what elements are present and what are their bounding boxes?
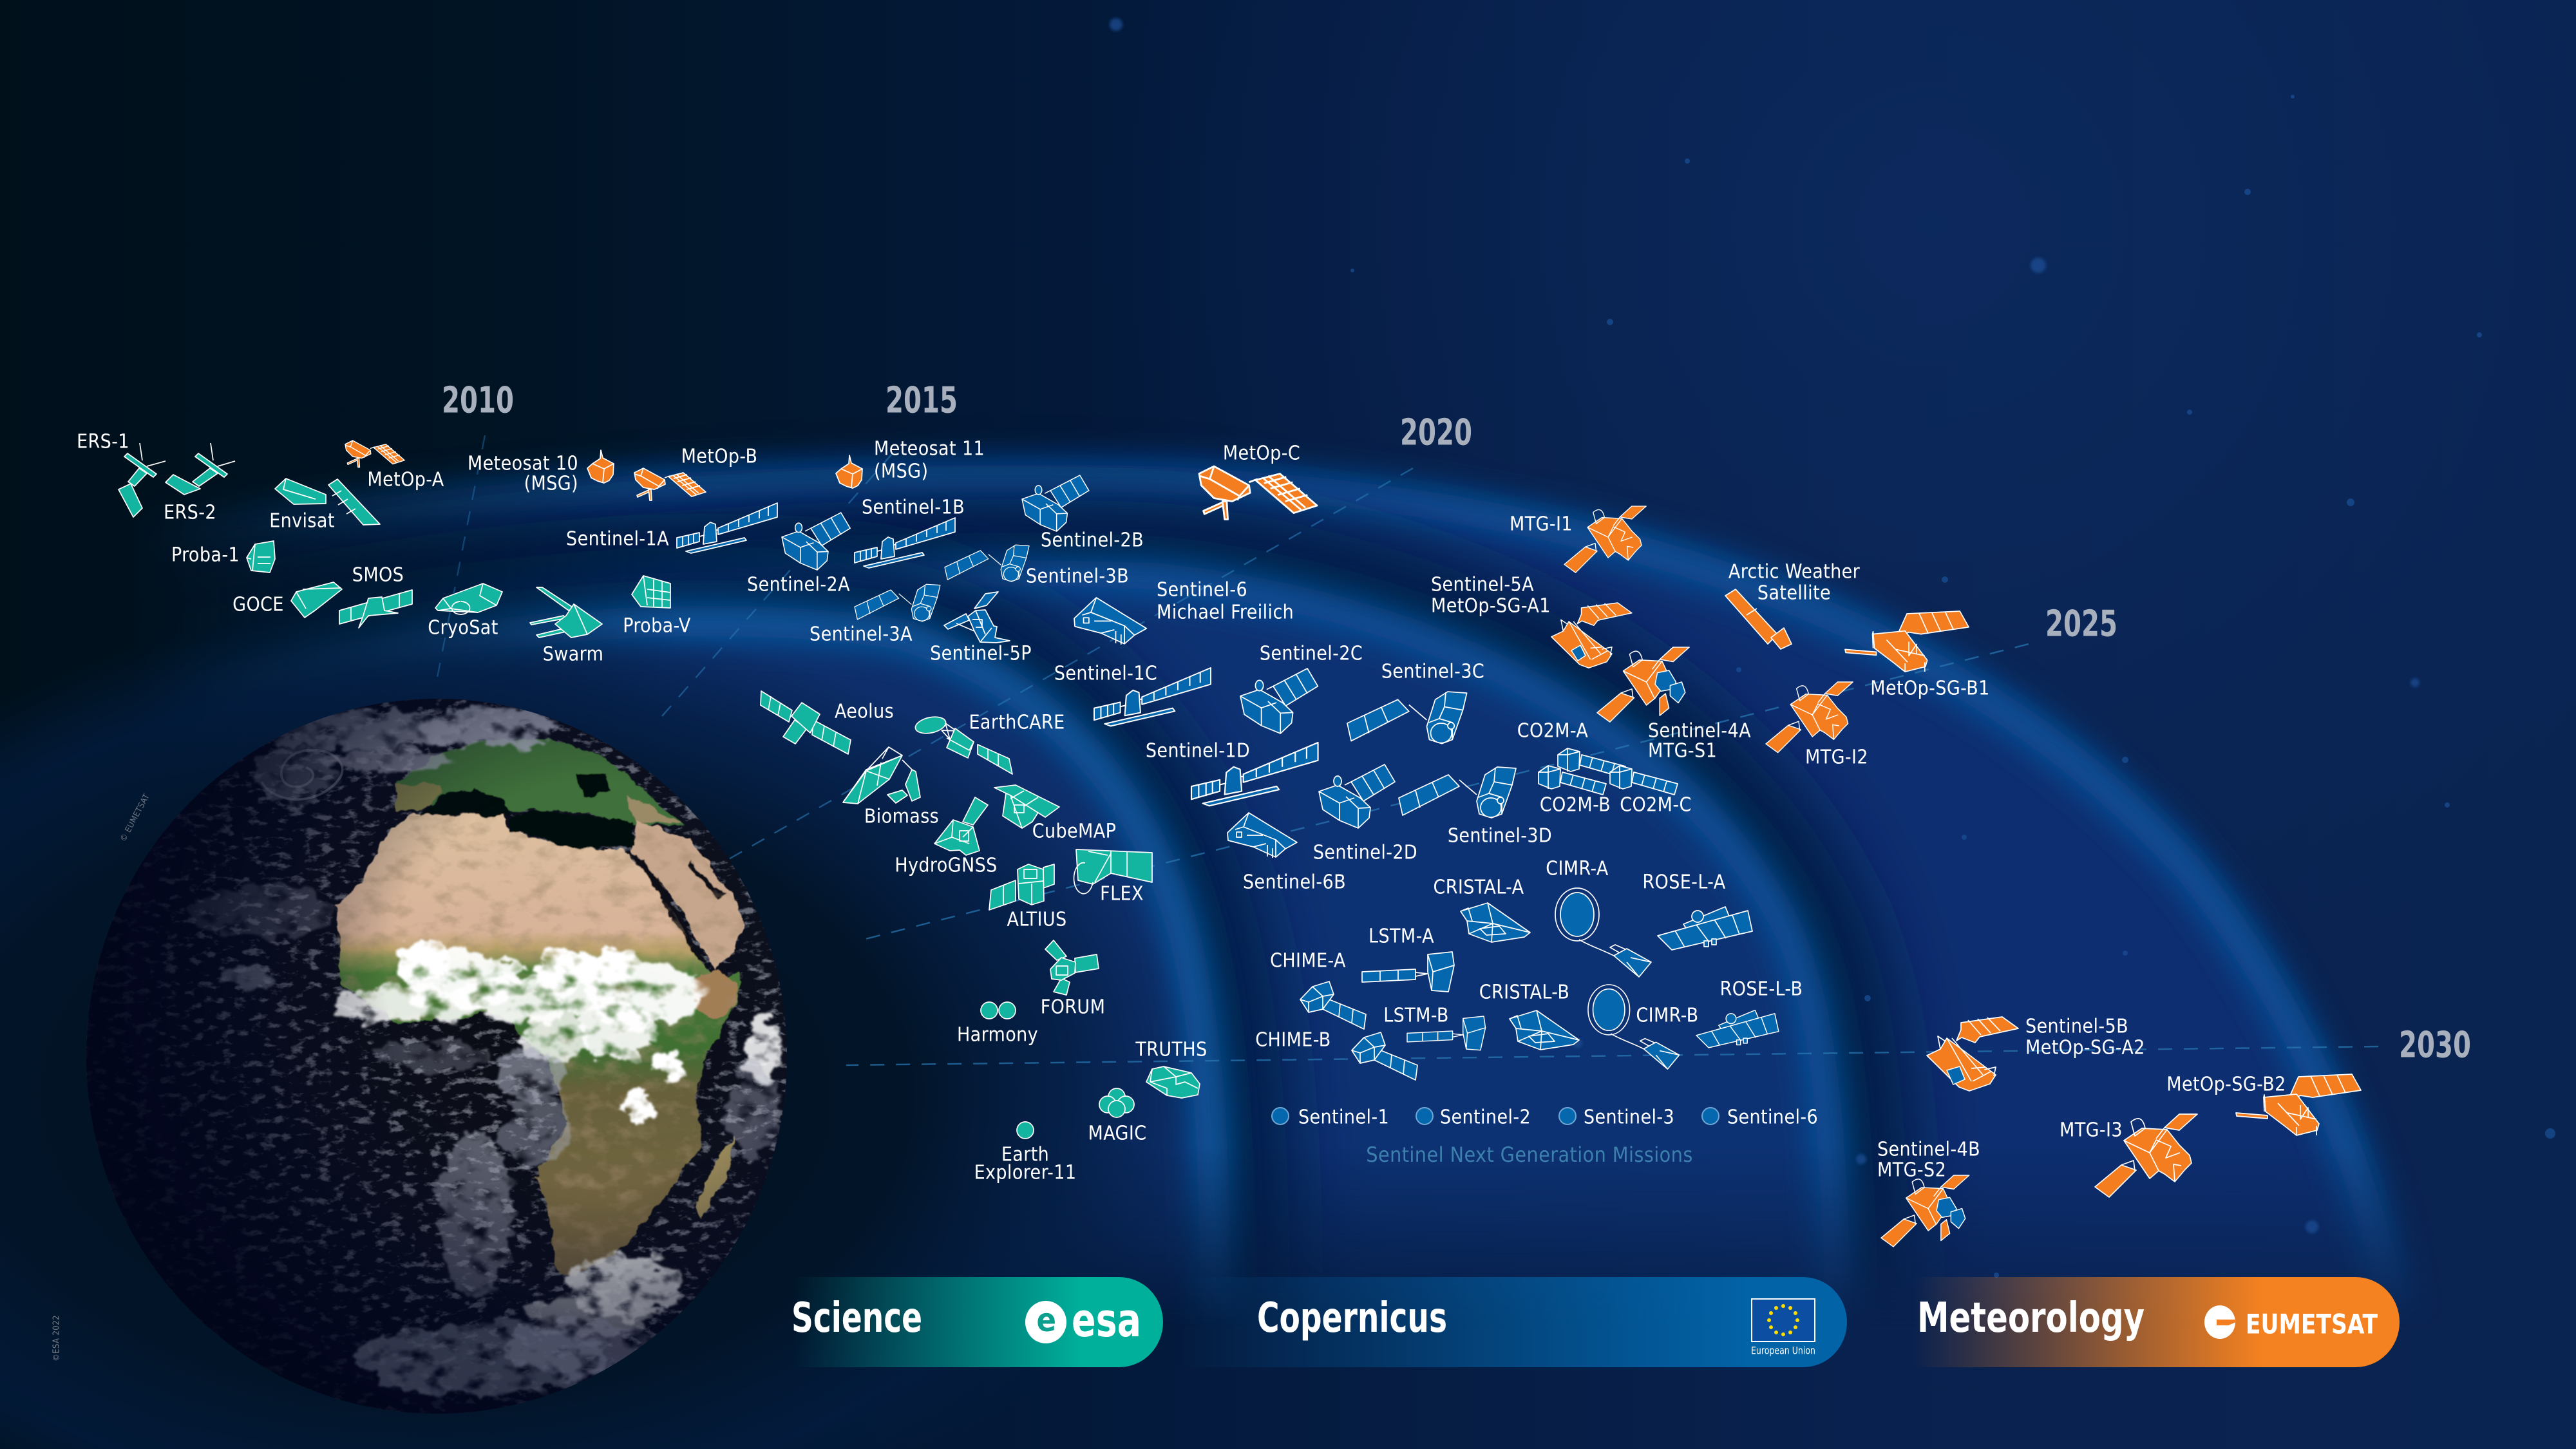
satellite: SMOS: SMOS [352, 564, 404, 586]
satellite: Aeolus: Aeolus [835, 701, 894, 723]
satellite: Sentinel-5A MetOp-SG-A1 [1431, 573, 1632, 668]
legend caption: Sentinel Next Generation Missions [1366, 1142, 1693, 1167]
satellite: Sentinel-5B MetOp-SG-A2: Sentinel-5B [2025, 1015, 2128, 1038]
Earth globe [74, 686, 799, 1431]
satellite: Sentinel-3C: Sentinel-3C [1381, 661, 1484, 683]
satellite: EarthCARE: EarthCARE [969, 711, 1065, 734]
satellite: MetOp-C [1199, 442, 1317, 519]
satellite: Sentinel-4A MTG-S1 [1597, 647, 1751, 762]
satellite: LSTM-B [1383, 1005, 1486, 1050]
satellite: Sentinel-1B [855, 496, 965, 568]
satellite: CHIME-B [1255, 1029, 1417, 1080]
satellite: CO2M-A [1517, 720, 1625, 777]
satellite: ROSE-L-A: ROSE-L-A [1642, 871, 1726, 894]
year timeline dashed lines [435, 435, 2378, 1065]
satellite: Proba-V: Proba-V [623, 614, 691, 638]
satellite: ALTIUS: ALTIUS [1007, 908, 1067, 931]
satellite: Arctic Weather Satellite: Satellite [1757, 582, 1831, 604]
satellite: MetOp-SG-B2 [2166, 1073, 2361, 1135]
satellite: MetOp-B: MetOp-B [681, 446, 757, 468]
satellite: CRISTAL-A [1434, 876, 1530, 942]
satellite: Sentinel-4B MTG-S2: MTG-S2 [1877, 1159, 1946, 1181]
satellite: HydroGNSS [895, 797, 998, 877]
satellite: Sentinel-2B: Sentinel-2B [1041, 529, 1144, 551]
satellite: CIMR-B: CIMR-B [1636, 1005, 1699, 1027]
satellite: Sentinel-2C [1240, 643, 1363, 734]
year labels: 2020 [1400, 412, 1472, 453]
satellite: EarthCARE [914, 711, 1065, 774]
satellite: CryoSat [428, 583, 502, 639]
satellite: Sentinel-3C [1347, 661, 1484, 744]
satellite: Sentinel-4A MTG-S1: Sentinel-4A [1648, 720, 1751, 742]
satellite: Sentinel-1D [1146, 739, 1318, 806]
logo: EUMETSAT [2204, 1305, 2378, 1340]
satellite: Meteosat 11: Meteosat 11 [874, 438, 985, 460]
year labels: 2025 [2045, 603, 2117, 645]
satellite: TRUTHS: TRUTHS [1135, 1038, 1208, 1061]
satellite: Sentinel-1A [566, 503, 777, 553]
panel: Copernicus Sentinels [566, 475, 1803, 1080]
satellite: Swarm: Swarm [543, 643, 603, 666]
satellite: MTG-I2 [1766, 682, 1868, 769]
satellite: FLEX [1074, 849, 1152, 905]
panel: Science programme bar: Science [791, 1294, 922, 1342]
satellite: LSTM-A: LSTM-A [1368, 925, 1434, 948]
satellite: Sentinel-1C: Sentinel-1C [1054, 662, 1157, 685]
satellite: Proba-1 [171, 541, 275, 573]
satellite: ERS-2 [164, 443, 235, 524]
satellite: Sentinel-6B [1227, 813, 1346, 894]
satellite: CHIME-B: CHIME-B [1255, 1029, 1331, 1051]
logo: esa [1025, 1293, 1141, 1347]
satellite: Aeolus [761, 691, 894, 754]
satellite: FORUM [1041, 940, 1105, 1019]
satellite: Sentinel-3A: Sentinel-3A [810, 623, 913, 645]
satellite: CO2M-C: CO2M-C [1620, 793, 1692, 817]
satellite: ROSE-L-B [1696, 978, 1803, 1048]
logo: esa: esa [1072, 1293, 1141, 1347]
satellite: Envisat [269, 478, 380, 532]
satellite: MAGIC [1088, 1088, 1146, 1145]
satellite: CubeMAP [994, 785, 1116, 842]
satellite: MetOp-A: MetOp-A [367, 469, 444, 491]
satellite: Sentinel-2D: Sentinel-2D [1313, 841, 1417, 864]
satellite: Sentinel-2A: Sentinel-2A [747, 573, 850, 596]
satellite: Sentinel-4B MTG-S2 [1877, 1139, 1980, 1247]
satellite: Arctic Weather Satellite [1725, 560, 1861, 649]
satellite: MTG-I1: MTG-I1 [1510, 513, 1573, 536]
satellite: ERS-2: ERS-2 [164, 501, 216, 524]
satellite: ERS-1: ERS-1 [77, 430, 129, 453]
satellite: MTG-I3 [2060, 1114, 2197, 1197]
satellite: Proba-1: Proba-1 [171, 544, 240, 567]
satellite: CryoSat: CryoSat [428, 617, 498, 639]
satellite: MetOp-SG-B1 [1845, 611, 1990, 699]
satellite: ROSE-L-B: ROSE-L-B [1720, 978, 1803, 1001]
satellite: CRISTAL-B [1479, 981, 1579, 1050]
satellite: MTG-I3: MTG-I3 [2060, 1119, 2123, 1141]
satellite: Sentinel-6 Michael Freilich: Michael Freilich [1157, 601, 1294, 623]
legend: Sentinel next generation: Sentinel-6 [1727, 1106, 1818, 1128]
satellite: CubeMAP: CubeMAP [1032, 820, 1116, 842]
satellite: MetOp-SG-B1: MetOp-SG-B1 [1870, 677, 1990, 699]
satellite: Sentinel-1B: Sentinel-1B [862, 496, 965, 519]
satellite: Meteosat 10: (MSG) [524, 473, 578, 495]
satellite: FORUM: FORUM [1041, 996, 1105, 1019]
satellite: Sentinel-2C: Sentinel-2C [1260, 643, 1363, 665]
satellite: Sentinel-6 Michael Freilich: Sentinel-6 [1157, 578, 1247, 601]
orbit bands [180, 439, 2410, 1307]
satellite: Sentinel-1D: Sentinel-1D [1146, 739, 1250, 762]
satellite: LSTM-B: LSTM-B [1383, 1005, 1449, 1027]
credit: EUMETSAT: © EUMETSAT [118, 792, 152, 844]
satellite: Arctic Weather Satellite: Arctic Weather [1728, 560, 1861, 583]
satellite: Earth Explorer-11: Explorer-11 [974, 1162, 1076, 1184]
satellite: Biomass: Biomass [864, 805, 939, 828]
panel: Science programme bar [791, 1277, 1163, 1367]
panel: future science missions [761, 691, 1208, 1184]
satellite: Harmony: Harmony [957, 1024, 1038, 1046]
satellite: Meteosat 10: Meteosat 10 [468, 452, 578, 475]
satellite: Sentinel-5P: Sentinel-5P [930, 643, 1032, 665]
satellite: CO2M-B [1539, 766, 1611, 817]
panel: early science missions [77, 430, 691, 666]
satellite: Meteosat 11: (MSG) [874, 460, 928, 483]
satellite: Sentinel-5A MetOp-SG-A1: Sentinel-5A [1431, 573, 1534, 596]
satellite: ROSE-L-A [1642, 871, 1752, 950]
satellite: MetOp-A [345, 440, 444, 491]
satellite: ERS-1 [77, 430, 166, 517]
logo: European Union flag: European Union [1751, 1345, 1815, 1356]
satellite: CO2M-C [1610, 766, 1692, 817]
panel: Meteorology programme bar: Meteorology [1917, 1294, 2145, 1342]
logo: EUMETSAT: EUMETSAT [2246, 1309, 2378, 1340]
satellite: MetOp-C: MetOp-C [1223, 442, 1300, 465]
satellite: Meteosat 10 [468, 450, 614, 495]
satellite: CHIME-A [1270, 949, 1366, 1029]
satellite: LSTM-A [1362, 925, 1454, 992]
satellite: CRISTAL-A: CRISTAL-A [1434, 876, 1524, 899]
legend: Sentinel next generation: Sentinel-1 [1298, 1106, 1389, 1128]
year labels: 2010 [442, 380, 514, 421]
legend: Sentinel next generation: Sentinel-3 [1584, 1106, 1674, 1128]
satellite: Swarm [530, 587, 603, 666]
satellite: CO2M-A: CO2M-A [1517, 720, 1588, 742]
satellite: FLEX: FLEX [1100, 882, 1144, 905]
satellite: Sentinel-6B: Sentinel-6B [1243, 871, 1346, 894]
satellite: Biomass [843, 747, 939, 828]
satellite: Sentinel-5B MetOp-SG-A2: MetOp-SG-A2 [2025, 1037, 2145, 1059]
credit: ESA 2022: ©ESA 2022 [52, 1315, 62, 1361]
satellite: Sentinel-1A: Sentinel-1A [566, 528, 669, 550]
satellite: Sentinel-4B MTG-S2: Sentinel-4B [1877, 1139, 1980, 1160]
satellite: GOCE: GOCE [232, 594, 284, 616]
satellite: CIMR-A [1546, 858, 1651, 977]
panel: next generation meteorology [1431, 506, 2361, 1247]
year labels: 2030 [2399, 1024, 2471, 1066]
logo: European Union flag [1751, 1299, 1815, 1356]
satellite: TRUTHS [1135, 1038, 1208, 1098]
satellite: CRISTAL-B: CRISTAL-B [1479, 981, 1569, 1003]
satellite: Sentinel-3D: Sentinel-3D [1448, 824, 1552, 848]
panel: Copernicus programme bar [1174, 1277, 1847, 1367]
satellite: MetOp-SG-B2: MetOp-SG-B2 [2166, 1073, 2286, 1096]
satellite: Sentinel-3D [1399, 767, 1552, 848]
satellite: Sentinel-4A MTG-S1: MTG-S1 [1648, 739, 1717, 762]
satellite: Sentinel-2A [747, 513, 850, 596]
satellite: Sentinel-1C [1054, 662, 1211, 726]
satellite: Sentinel-5P [930, 592, 1032, 665]
satellite: Sentinel-5A MetOp-SG-A1: MetOp-SG-A1 [1431, 595, 1551, 617]
satellite: HydroGNSS: HydroGNSS [895, 854, 998, 877]
satellite: CO2M-B: CO2M-B [1540, 793, 1611, 817]
satellite: Envisat: Envisat [269, 510, 335, 532]
satellite: Sentinel-2D [1313, 764, 1417, 864]
satellite: Sentinel-2B [1022, 475, 1144, 551]
satellite: MTG-I2: MTG-I2 [1805, 746, 1868, 769]
logo: esa: e [1037, 1302, 1056, 1339]
panel: Meteorology programme bar [1911, 1277, 2400, 1367]
satellite: MetOp-B [634, 446, 757, 500]
satellite: GOCE [232, 582, 342, 618]
satellite: Sentinel-3A [810, 584, 940, 645]
legend: Sentinel next generation: Sentinel-2 [1440, 1106, 1531, 1128]
satellite: MAGIC: MAGIC [1088, 1122, 1146, 1145]
satellite: Meteosat 11 [836, 438, 985, 488]
satellite: Earth Explorer-11: Earth [1001, 1144, 1049, 1166]
satellite: Sentinel-5B MetOp-SG-A2 [1927, 1015, 2145, 1091]
year labels [442, 380, 2471, 1066]
satellite: Sentinel-3B [945, 545, 1129, 587]
panel: meteorology 2006-2018 [345, 438, 1317, 519]
satellite: Sentinel-6 Michael Freilich [1074, 578, 1294, 645]
satellite: ALTIUS [989, 864, 1067, 931]
satellite: Proba-V [623, 576, 691, 638]
satellite: MTG-I1 [1510, 506, 1646, 573]
satellite: Harmony [957, 1002, 1038, 1046]
satellite: Earth Explorer-11 [974, 1122, 1076, 1184]
satellite: CHIME-A: CHIME-A [1270, 949, 1346, 972]
satellite: CIMR-B [1588, 985, 1699, 1069]
legend: Sentinel next generation [1272, 1106, 1818, 1128]
satellite: SMOS [339, 564, 412, 628]
year labels: 2015 [886, 380, 958, 421]
satellite: CIMR-A: CIMR-A [1546, 858, 1609, 880]
satellite: Sentinel-3B: Sentinel-3B [1026, 565, 1129, 587]
panel: Copernicus programme bar: Copernicus [1257, 1294, 1447, 1342]
